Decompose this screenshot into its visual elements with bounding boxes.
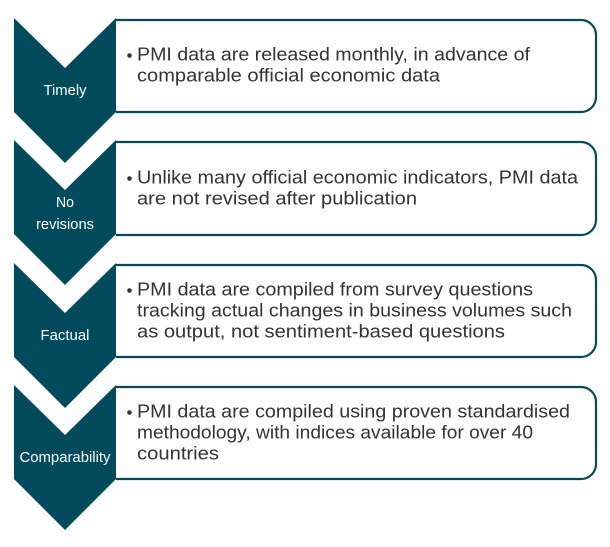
label: Comparability: Comparability [20, 450, 111, 466]
panel: No revisions description [116, 142, 596, 235]
step 3: Factual [14, 263, 596, 408]
text: No revisions bullet: are not revised after publication [137, 188, 417, 208]
chevron: Factual [14, 263, 116, 408]
text: Comparability bullet: countries [137, 444, 219, 464]
step 2: No revisions [14, 140, 596, 285]
label: Timely: Timely [44, 83, 87, 99]
label: No revisions [36, 195, 94, 233]
text: Timely bullet [127, 44, 531, 86]
panel: Comparability description [116, 387, 596, 479]
label: No revisions: No [56, 195, 74, 211]
text: Timely bullet: PMI data are released monthly, in advance of [137, 44, 531, 64]
text: Comparability bullet [127, 402, 570, 464]
step 1: Timely [14, 18, 596, 163]
chevron: Timely [14, 18, 116, 163]
text: No revisions bullet [127, 168, 579, 208]
chevron: No revisions [14, 140, 116, 285]
text: Timely bullet: comparable official economic data [137, 66, 441, 86]
text: Comparability bullet: PMI data are compiled using proven standardised [137, 402, 570, 422]
label: No revisions: revisions [36, 217, 94, 233]
text: Factual bullet: as output, not sentiment-based questions [137, 322, 505, 342]
text: Factual bullet: tracking actual changes in business volumes such [137, 300, 572, 320]
text: Factual bullet [127, 280, 572, 342]
panel: Timely description [116, 20, 596, 112]
step 4: Comparability [14, 385, 596, 530]
text: No revisions bullet: Unlike many official economic indicators, PMI data [137, 168, 579, 188]
text: Comparability bullet: methodology, with indices available for over 40 [137, 422, 533, 442]
label: Factual: Factual [40, 328, 90, 344]
text: Factual bullet: PMI data are compiled from survey questions [137, 280, 533, 300]
panel: Factual description [116, 265, 596, 357]
chevron: Comparability [14, 385, 116, 530]
